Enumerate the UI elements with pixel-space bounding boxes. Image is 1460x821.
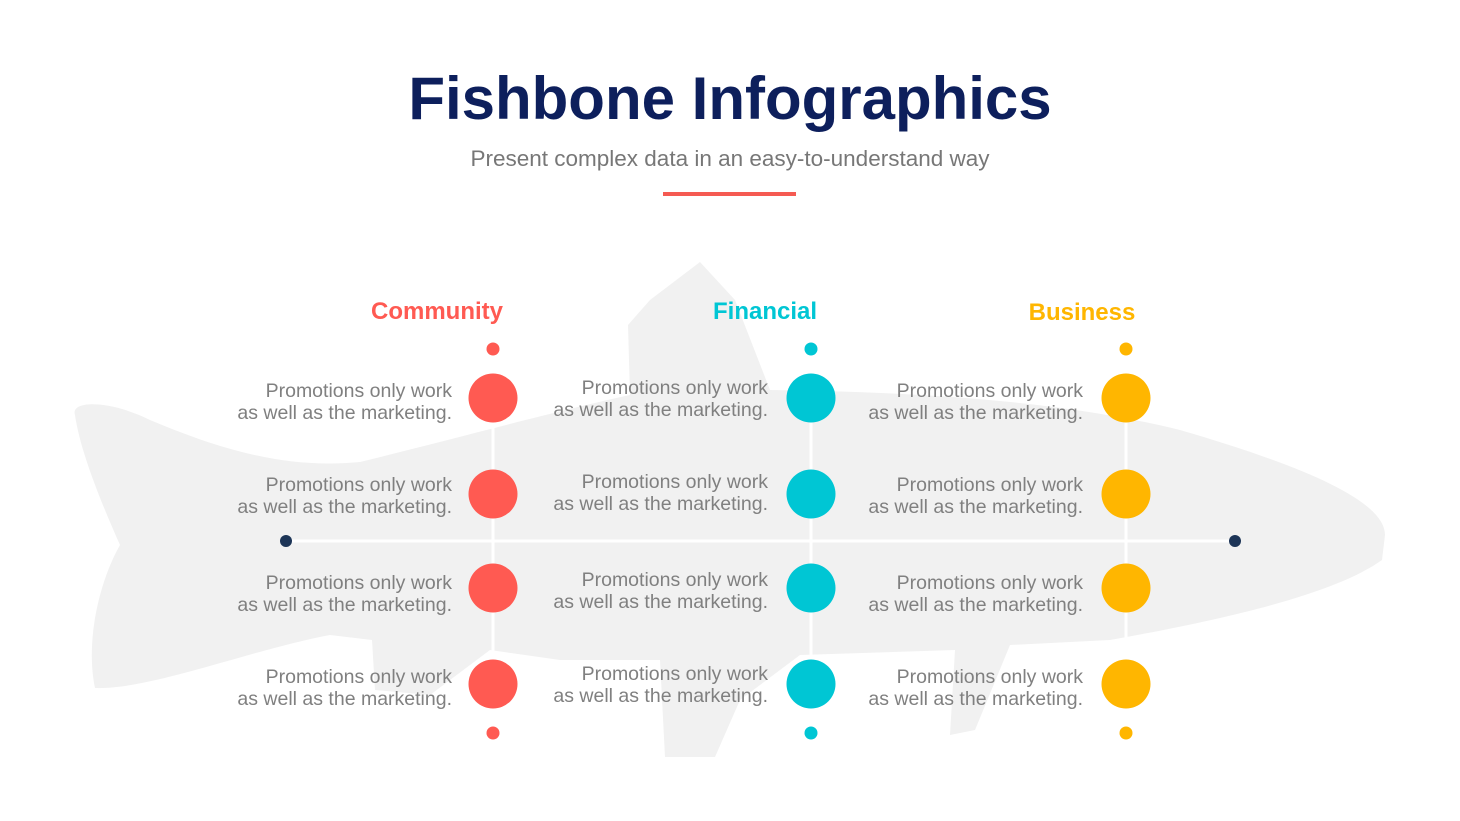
accent underline (663, 192, 796, 196)
community texts: Promotions only work (266, 666, 452, 688)
heading: Business: Business (1029, 299, 1135, 326)
financial texts: Promotions only work (582, 663, 768, 685)
business texts: as well as the marketing. (868, 496, 1083, 518)
financial texts: Promotions only work (582, 471, 768, 493)
business texts: as well as the marketing. (868, 688, 1083, 710)
community texts: as well as the marketing. (237, 402, 452, 424)
financial nodes (786, 342, 836, 740)
community texts: Promotions only work (266, 380, 452, 402)
business texts: Promotions only work (897, 474, 1083, 496)
business texts: Promotions only work (897, 380, 1083, 402)
heading: Community: Community (371, 298, 503, 325)
financial texts: as well as the marketing. (553, 685, 768, 707)
business texts: Promotions only work (897, 572, 1083, 594)
community texts: as well as the marketing. (237, 496, 452, 518)
business texts: as well as the marketing. (868, 594, 1083, 616)
business nodes (1102, 342, 1150, 740)
heading: Financial: Financial (713, 298, 817, 325)
business texts: as well as the marketing. (868, 402, 1083, 424)
financial texts: as well as the marketing. (553, 591, 768, 613)
community texts: Promotions only work (266, 474, 452, 496)
financial texts: Promotions only work (582, 569, 768, 591)
business texts (868, 380, 1083, 710)
community nodes (468, 342, 518, 740)
community texts: as well as the marketing. (237, 688, 452, 710)
community texts: as well as the marketing. (237, 594, 452, 616)
financial texts: as well as the marketing. (553, 399, 768, 421)
financial texts: Promotions only work (582, 377, 768, 399)
subtitle: Present complex data in an easy-to-understand way (470, 146, 990, 171)
title: Fishbone Infographics (408, 65, 1052, 132)
community texts (237, 380, 452, 710)
community texts: Promotions only work (266, 572, 452, 594)
business texts: Promotions only work (897, 666, 1083, 688)
financial texts (553, 377, 768, 707)
spine end dots (280, 535, 1241, 547)
financial texts: as well as the marketing. (553, 493, 768, 515)
fish silhouette (75, 262, 1385, 757)
